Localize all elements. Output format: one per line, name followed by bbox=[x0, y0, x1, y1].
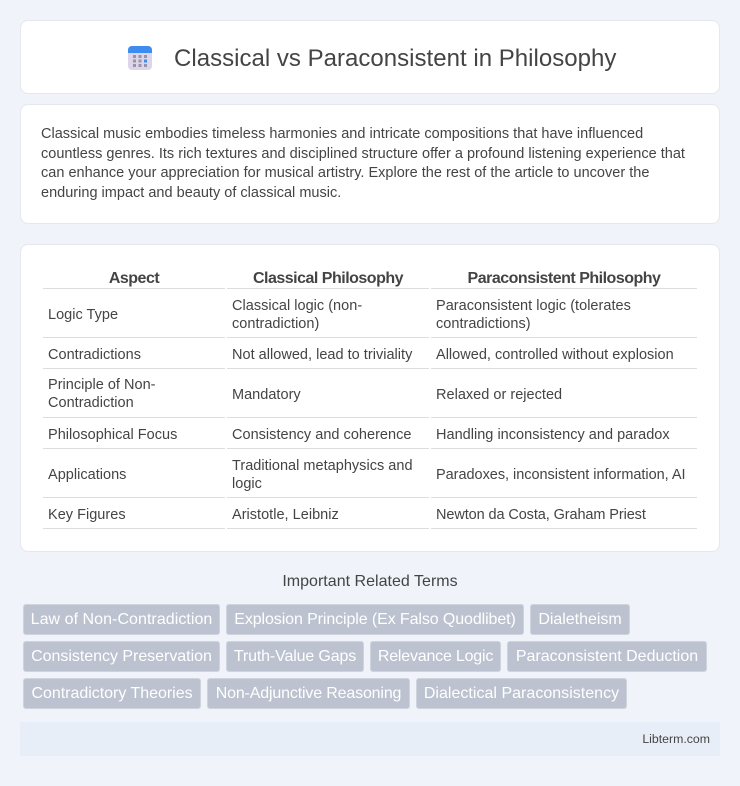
intro text: enduring impact and beauty of classical music. bbox=[41, 185, 341, 201]
row: contradictions bbox=[48, 347, 674, 363]
icon: calendar bbox=[128, 46, 152, 70]
row: philosophical focus: Philosophical Focus bbox=[48, 427, 177, 443]
row: principle of non-contradiction bbox=[48, 377, 562, 411]
related terms tags: Truth-Value Gaps bbox=[234, 648, 356, 665]
row: logic type: contradictions) bbox=[436, 316, 531, 332]
related terms tags: Consistency Preservation bbox=[31, 648, 212, 665]
row: logic type: Paraconsistent logic (tolerates bbox=[436, 298, 631, 314]
row: key figures: Key Figures bbox=[48, 507, 126, 523]
related terms heading: Important Related Terms bbox=[282, 573, 458, 590]
row: contradictions: Not allowed, lead to triviality bbox=[232, 347, 412, 363]
row: principle of non-contradiction: Relaxed or rejected bbox=[436, 387, 562, 403]
row: philosophical focus: Handling inconsistency and paradox bbox=[436, 427, 670, 443]
header row bbox=[109, 270, 661, 287]
intro text: can enhance your appreciation for musical artistry. Explore the rest of the article to uncover the bbox=[41, 165, 649, 181]
intro text: Classical music embodies timeless harmonies and intricate compositions that have influenced bbox=[41, 126, 643, 142]
related terms tags: Non-Adjunctive Reasoning bbox=[216, 685, 401, 702]
row: philosophical focus bbox=[48, 427, 670, 443]
row: contradictions: Allowed, controlled without explosion bbox=[436, 347, 674, 363]
related terms tags bbox=[23, 604, 707, 709]
row: key figures bbox=[48, 507, 646, 523]
intro card bbox=[20, 104, 720, 224]
row: principle of non-contradiction: Mandatory bbox=[232, 387, 301, 403]
title: Classical vs Paraconsistent in Philosophy bbox=[174, 45, 616, 72]
row: logic type: Logic Type bbox=[48, 307, 118, 323]
row: principle of non-contradiction: Principle of Non- bbox=[48, 377, 156, 393]
row: logic type: contradiction) bbox=[232, 316, 319, 332]
row: logic type: Classical logic (non- bbox=[232, 298, 362, 314]
related terms tags: Law of Non-Contradiction bbox=[31, 611, 212, 628]
table card bbox=[20, 244, 720, 552]
row: contradictions: Contradictions bbox=[48, 347, 141, 363]
row: applications: Paradoxes, inconsistent information, AI bbox=[436, 467, 686, 483]
related terms tags: Explosion Principle (Ex Falso Quodlibet) bbox=[234, 611, 516, 628]
footer bar bbox=[20, 722, 720, 756]
title card bbox=[20, 20, 720, 94]
row: principle of non-contradiction: Contradiction bbox=[48, 395, 134, 411]
related terms tags: Relevance Logic bbox=[378, 648, 493, 665]
related terms tags: Contradictory Theories bbox=[31, 685, 193, 702]
header row: Paraconsistent Philosophy bbox=[468, 270, 660, 287]
header row: Classical Philosophy bbox=[253, 270, 403, 287]
row: applications: Applications bbox=[48, 467, 126, 483]
row: applications: Traditional metaphysics and bbox=[232, 458, 413, 474]
row: key figures: Newton da Costa, Graham Priest bbox=[436, 507, 646, 523]
row: logic type bbox=[48, 298, 631, 332]
row: applications bbox=[48, 458, 686, 492]
footer credit: Libterm.com bbox=[642, 732, 710, 746]
intro text: countless genres. Its rich textures and disciplined structure offer a profound listening experience that bbox=[41, 146, 685, 162]
row: applications: logic bbox=[232, 476, 262, 492]
related terms tags: Dialetheism bbox=[538, 611, 622, 628]
row: philosophical focus: Consistency and coherence bbox=[232, 427, 411, 443]
row: key figures: Aristotle, Leibniz bbox=[232, 507, 339, 523]
related terms tags: Paraconsistent Deduction bbox=[516, 648, 698, 665]
related terms tags: Dialectical Paraconsistency bbox=[424, 685, 619, 702]
intro text bbox=[41, 126, 685, 201]
header row: Aspect bbox=[109, 270, 159, 287]
comparison table bbox=[43, 270, 697, 529]
